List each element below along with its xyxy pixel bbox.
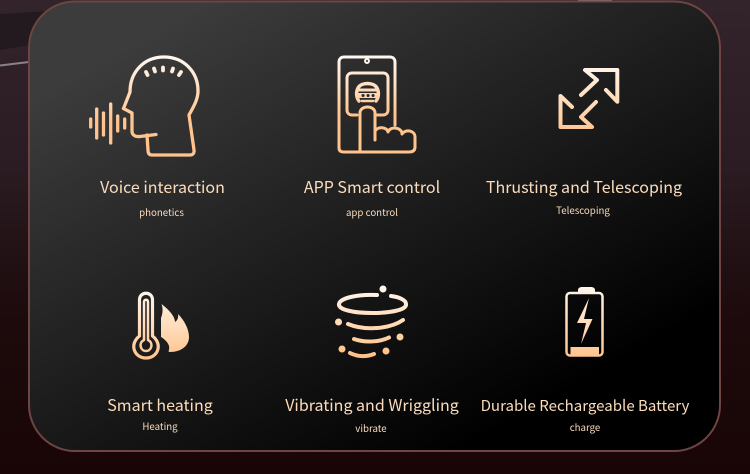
heading: smart heating: Smart heating <box>107 392 213 416</box>
heading: vibrating and wriggling: Vibrating and Wriggling <box>285 392 459 416</box>
caption: app control: app control <box>346 205 398 219</box>
caption: telescoping: Telescoping <box>556 203 610 217</box>
feature: smart heating <box>107 293 213 433</box>
icon: phone with finger <box>339 57 415 152</box>
icon: talking head <box>91 57 198 155</box>
background top highlight <box>578 0 612 2</box>
heading: durable rechargeable battery: Durable Rechargeable Battery <box>481 395 690 416</box>
feature: voice interaction <box>91 57 225 219</box>
feature: thrusting and telescoping <box>486 70 682 217</box>
feature: durable rechargeable battery <box>481 287 690 434</box>
icon: whirlwind <box>335 286 406 356</box>
caption: heating: Heating <box>142 419 178 433</box>
feature: app smart control <box>304 57 440 219</box>
caption: vibrate: vibrate <box>355 421 387 435</box>
caption: phonetics: phonetics <box>139 205 184 219</box>
heading: app smart control: APP Smart control <box>304 174 440 198</box>
icon: battery <box>566 287 602 356</box>
background streak <box>0 62 29 66</box>
heading: voice interaction: Voice interaction <box>100 174 225 198</box>
background dark band <box>0 11 50 50</box>
icon: thermometer and flame <box>134 293 189 358</box>
icon: expand arrows <box>560 70 617 127</box>
heading: thrusting and telescoping: Thrusting and Telescoping <box>486 174 682 198</box>
feature: vibrating and wriggling <box>285 286 459 435</box>
caption: charge: charge <box>570 420 600 434</box>
